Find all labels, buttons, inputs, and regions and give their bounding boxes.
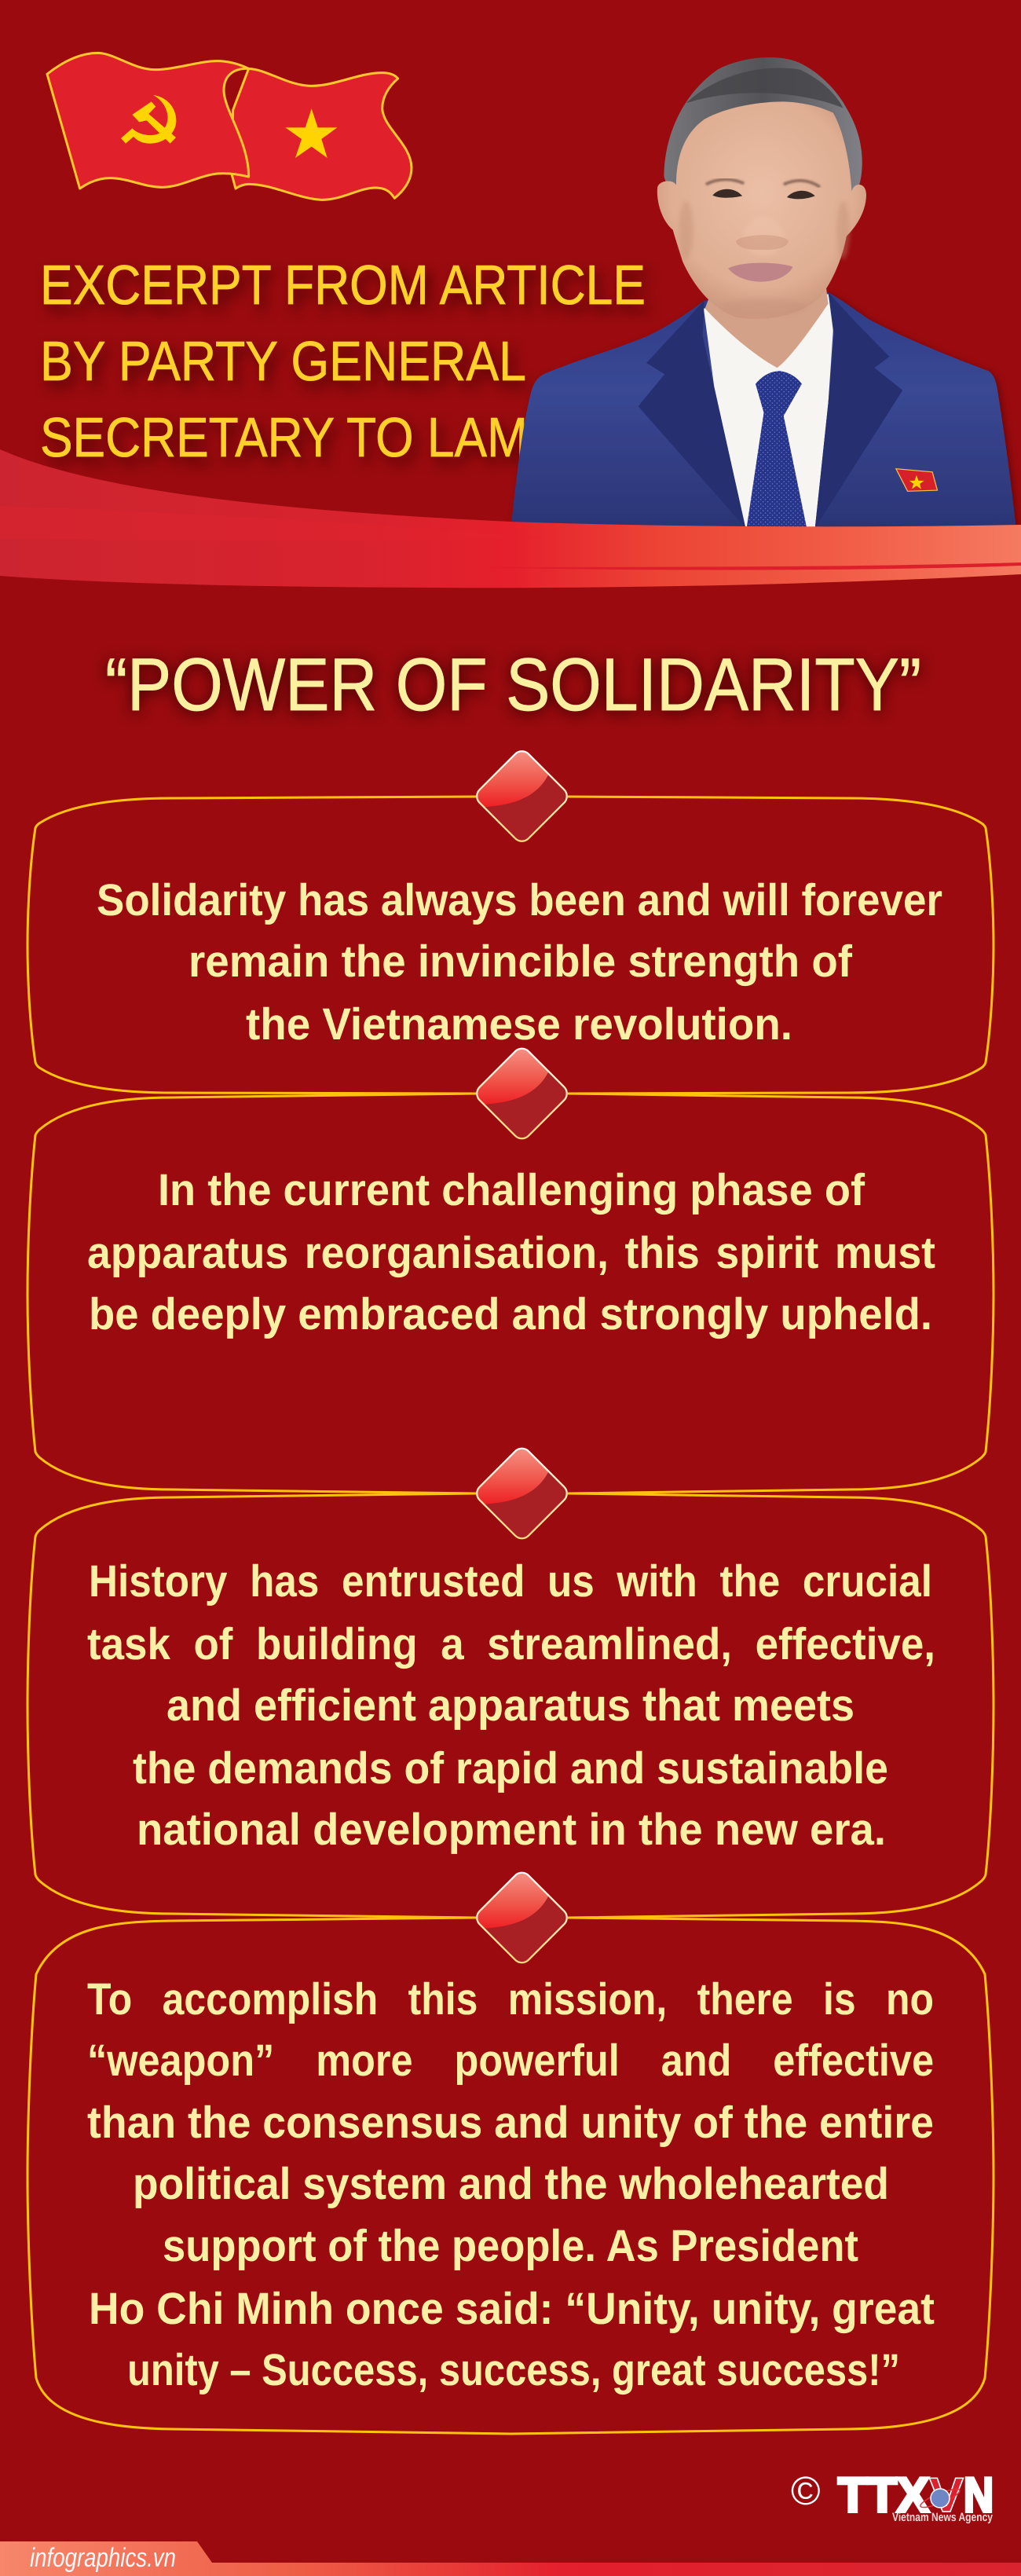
left lapel bbox=[639, 300, 745, 528]
panel text: “weapon” more powerful and effective bbox=[87, 2036, 934, 2086]
logo: TTXVN bbox=[838, 2468, 994, 2524]
mouth bbox=[728, 263, 793, 282]
hair bbox=[664, 57, 862, 204]
heading: excerpt from article: SECRETARY TO LAM bbox=[40, 407, 528, 469]
portrait: General Secretary To Lam bbox=[511, 57, 1016, 534]
panel border bbox=[27, 1918, 994, 2434]
icon: diamond 4 bbox=[473, 1869, 571, 1966]
panel text: remain the invincible strength of bbox=[188, 936, 853, 987]
panel text: and efficient apparatus that meets bbox=[167, 1680, 854, 1731]
icon: waving flags bbox=[47, 53, 412, 200]
face bbox=[657, 101, 866, 319]
panel text bbox=[87, 1165, 935, 1339]
panel text: History has entrusted us with the crucial bbox=[89, 1556, 932, 1607]
panel text: than the consensus and unity of the entire bbox=[87, 2098, 934, 2148]
right lapel bbox=[815, 292, 902, 528]
icon: diamond 2 bbox=[473, 1045, 571, 1142]
panel text: the Vietnamese revolution. bbox=[246, 999, 792, 1050]
dark hair sweep bbox=[686, 68, 844, 108]
logo: TTXVN: TTX bbox=[838, 2468, 929, 2523]
heading: excerpt from article: BY PARTY GENERAL bbox=[40, 331, 526, 393]
heading: excerpt from article bbox=[40, 255, 646, 469]
panel text: Solidarity has always been and will forever bbox=[97, 875, 942, 925]
icon: Vietnam national flag bbox=[232, 68, 412, 200]
icon: Party flag with hammer and sickle bbox=[47, 53, 249, 189]
suit jacket bbox=[511, 292, 1016, 534]
panel text: unity – Success, success, great success!” bbox=[127, 2345, 900, 2395]
panel text bbox=[97, 875, 942, 1050]
panel border bbox=[27, 1094, 994, 1493]
panel 1: invincible strength bbox=[27, 797, 994, 1094]
panel text: task of building a streamlined, effective, bbox=[87, 1619, 935, 1669]
shirt bbox=[704, 294, 834, 528]
panel 3: historic task bbox=[27, 1493, 994, 1918]
panel text: Ho Chi Minh once said: “Unity, unity, great bbox=[89, 2284, 935, 2334]
panel text: national development in the new era. bbox=[137, 1805, 886, 1855]
facial shading bbox=[679, 201, 850, 315]
panel text: In the current challenging phase of bbox=[158, 1165, 865, 1215]
footer site label: infographics.vn bbox=[30, 2543, 176, 2573]
nose bbox=[736, 235, 789, 250]
panel border bbox=[27, 1493, 994, 1918]
panel text: the demands of rapid and sustainable bbox=[133, 1743, 888, 1794]
panel text: political system and the wholehearted bbox=[133, 2159, 889, 2209]
panel text: be deeply embraced and strongly upheld. bbox=[89, 1289, 932, 1339]
decorative red swoosh bbox=[0, 449, 1021, 588]
panel border bbox=[27, 797, 994, 1094]
footer band bbox=[0, 2541, 1021, 2576]
panel text bbox=[87, 1556, 935, 1855]
panel 2: apparatus reorganisation bbox=[27, 1094, 994, 1493]
panel 4: unity quote bbox=[27, 1918, 994, 2434]
panel text bbox=[87, 1974, 935, 2395]
left eye bbox=[712, 189, 742, 198]
panel text: apparatus reorganisation, this spirit must bbox=[87, 1228, 935, 1278]
logo: TTXVN: N bbox=[964, 2468, 994, 2523]
neck bbox=[705, 278, 829, 368]
icon: diamond 3 bbox=[473, 1445, 571, 1542]
copyright mark: © bbox=[791, 2468, 821, 2513]
main title: “POWER OF SOLIDARITY” bbox=[105, 643, 921, 727]
lapel pin bbox=[896, 469, 937, 491]
panel text: support of the people. As President bbox=[163, 2221, 858, 2271]
logo: TTXVN: V bbox=[929, 2468, 964, 2523]
right eye bbox=[787, 191, 815, 199]
heading: excerpt from article: EXCERPT FROM ARTICLE bbox=[40, 255, 646, 317]
necktie bbox=[747, 371, 807, 528]
eyebrows bbox=[706, 179, 820, 187]
icon: diamond 1 bbox=[473, 747, 571, 845]
logo: TTXVN: Vietnam News Agency bbox=[892, 2511, 994, 2524]
